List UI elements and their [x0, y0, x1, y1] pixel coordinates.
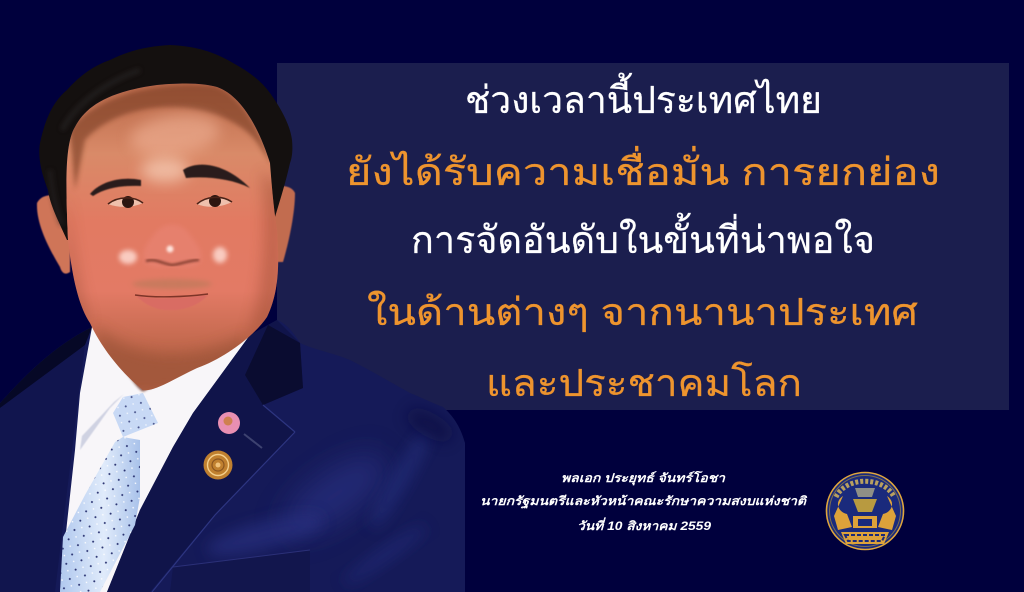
eyebrows [90, 179, 141, 196]
highlighted line 4: ในด้านต่างๆ จากนานาประเทศ [367, 291, 918, 334]
portrait [0, 45, 465, 592]
ear: left [37, 195, 70, 274]
highlighted line 2: ยังได้รับความเชื่อมั่น การยกย่อง [346, 146, 940, 194]
signature text: พลเอก ประยุทธ์ จันทร์โอชา [561, 470, 726, 486]
face [66, 84, 282, 395]
eye: right [197, 195, 232, 207]
heading line 1: ช่วงเวลานี้ประเทศไทย [465, 72, 822, 122]
mouth [135, 294, 208, 310]
shirt collar [60, 327, 250, 592]
eye: left [108, 196, 143, 208]
pin: pink [218, 412, 240, 434]
jacket lapel [107, 320, 303, 592]
necktie [60, 393, 158, 592]
hair [39, 45, 292, 240]
signature text: วันที่ 10 สิงหาคม 2559 [577, 517, 711, 533]
pin: gold [204, 450, 232, 480]
text line 3: การจัดอันดับในขั้นที่น่าพอใจ [411, 212, 875, 262]
highlighted line 5: และประชาคมโลก [486, 361, 802, 405]
icon: government seal [826, 472, 904, 550]
neck [90, 290, 250, 390]
nose [143, 224, 202, 267]
suit jacket [0, 320, 465, 592]
panel: quote [277, 63, 1009, 410]
signature text: นายกรัฐมนตรีและหัวหน้าคณะรักษาความสงบแห่งชาติ [480, 494, 808, 509]
ear: right [268, 186, 295, 262]
signature text [480, 470, 808, 533]
